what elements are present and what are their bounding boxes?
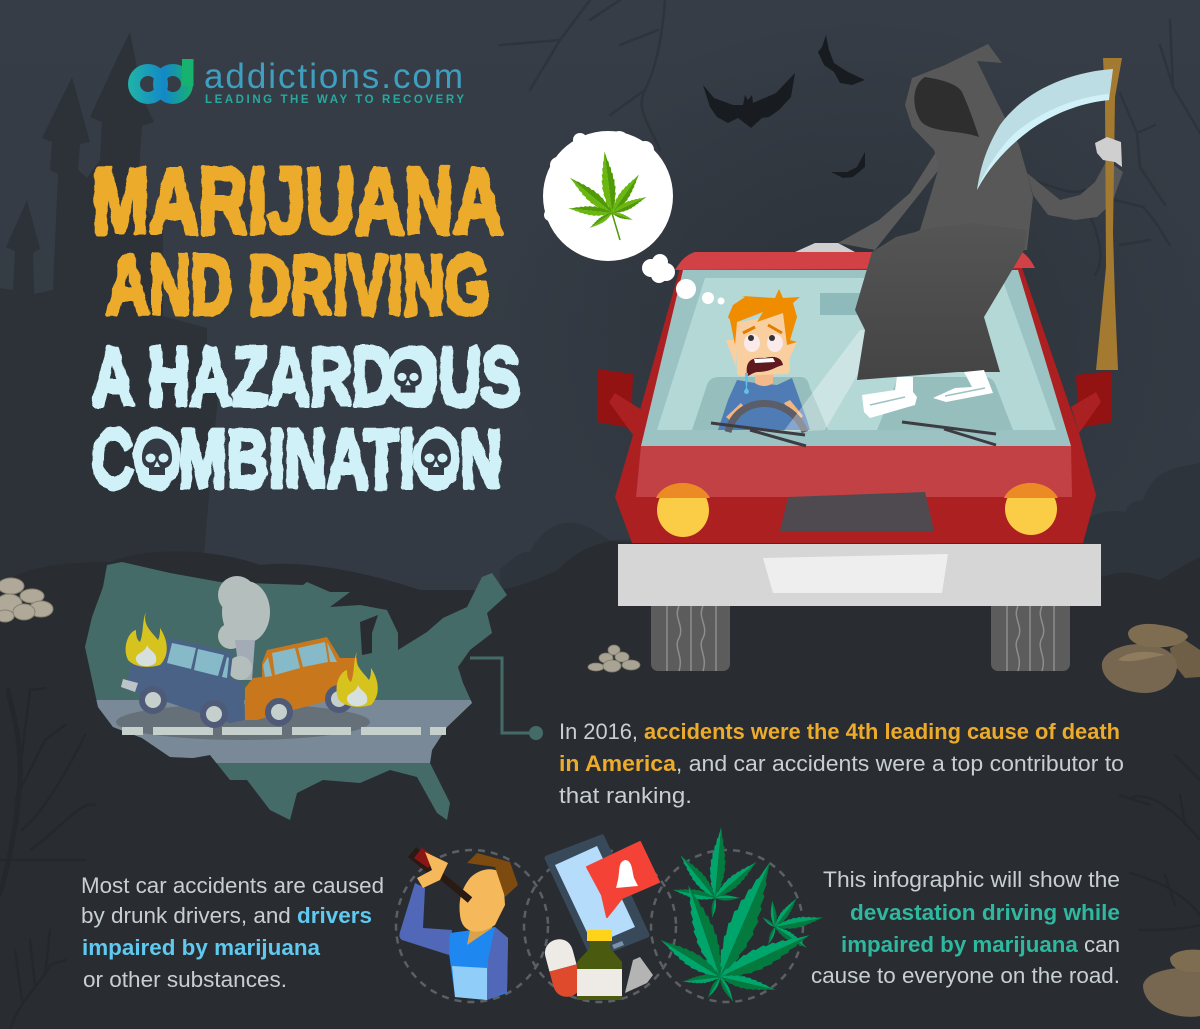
o backing hazardous: [386, 347, 430, 405]
left line 2: by drunk drivers, and drivers: [81, 903, 372, 928]
icon: pill: [542, 936, 584, 1000]
mirror right: [1071, 371, 1112, 433]
driver teeth: [754, 358, 775, 363]
alert bubble: [587, 842, 659, 917]
blue car body: [125, 638, 245, 723]
man shirt lower: [452, 966, 487, 1000]
road: [96, 700, 472, 763]
driver drool: [744, 373, 749, 394]
ground silhouette: [0, 541, 1200, 1029]
o backing combination right: [413, 428, 459, 488]
man hair: [467, 853, 518, 897]
right wiper: [902, 422, 996, 445]
blue car wheels: [142, 689, 225, 725]
fact line 3: that ranking.: [559, 783, 692, 808]
scythe blade edge: [977, 94, 1109, 190]
title line: and driving: AND DRIVING: [107, 238, 490, 332]
bat medium: [818, 35, 865, 85]
logo wordmark: addictions.com: [204, 57, 463, 96]
flame right: [337, 652, 378, 707]
bumper: [618, 544, 1101, 606]
left text block: [81, 873, 384, 992]
skeleton hand on pole: [1095, 137, 1122, 167]
right line 2: devastation driving while: [850, 900, 1120, 925]
left line 1: Most car accidents are caused: [81, 873, 384, 898]
marijuana leaf in thought: [566, 151, 648, 240]
alert bell: [616, 860, 638, 888]
bat large: [703, 73, 795, 128]
title: [92, 148, 520, 505]
man arm: [399, 883, 452, 955]
orange car windows: [263, 642, 337, 677]
rear view mirror: [820, 293, 860, 315]
background grass left: [0, 688, 95, 1029]
smoke: [218, 576, 270, 680]
blue car windows: [167, 643, 229, 678]
connector line: [470, 658, 543, 740]
right line 4: cause to everyone on the road.: [811, 963, 1120, 988]
thought bubble: [543, 131, 724, 304]
car: [615, 252, 1101, 671]
thought cloud: [543, 131, 673, 261]
blue car tail light: [121, 679, 138, 692]
right headlight: [1004, 483, 1058, 535]
logo icon: [134, 59, 194, 98]
icon: medicine bottle: [577, 930, 622, 1000]
leaf small right: [761, 896, 824, 951]
skull in combination right: [421, 438, 451, 475]
driver face: [735, 313, 790, 376]
accident fact text: [559, 719, 1124, 808]
reaper right arm: [1027, 160, 1123, 220]
skull in combination left: [142, 438, 172, 475]
rocks: small pile by car: [588, 645, 640, 672]
map land: [85, 562, 507, 820]
rocks: brown right pile: [1102, 624, 1200, 693]
car frame: [615, 268, 1096, 543]
fact line 1: In 2016, accidents were the 4th leading cause of death: [559, 719, 1120, 744]
reaper left arm: [838, 152, 941, 250]
road dashes: [122, 727, 446, 735]
driver: [718, 289, 810, 432]
icon: marijuana leaves: [657, 827, 824, 1003]
o backing combination left: [133, 428, 181, 488]
reaper cloak: [855, 223, 1027, 380]
phone button: [612, 941, 624, 949]
leaf large: [657, 857, 814, 1003]
logo tagline: LEADING THE WAY TO RECOVERY: [205, 94, 464, 106]
shadow behind reaper and car: [500, 20, 1200, 620]
phone screen: [555, 846, 635, 945]
fact line 2: in America, and car accidents were a top contributor to: [559, 751, 1124, 776]
left headlight: [656, 483, 710, 537]
man head: [459, 869, 505, 932]
thought trail: [642, 254, 724, 304]
license plate: [763, 554, 948, 593]
icon: powder bag: [625, 957, 653, 993]
orange car wheels: [268, 688, 350, 723]
driver shirt: [718, 378, 810, 430]
grille: [780, 492, 934, 531]
title line: marijuana: MARIJUANA: [92, 148, 503, 253]
background bushes: [500, 463, 1200, 620]
rocks: brown bottom right pile: [1143, 950, 1200, 1017]
background haunted castle silhouette: [0, 32, 218, 620]
flame left: [126, 612, 167, 667]
man sleeve: [487, 927, 508, 1000]
left wiper: [711, 423, 806, 446]
right wheel: [991, 600, 1070, 671]
driver ears: [726, 340, 797, 367]
icon: drunk man: [399, 848, 518, 1000]
orange car: [245, 637, 360, 723]
logo: [134, 57, 464, 106]
title line: combination: COMBINATION: [92, 412, 502, 505]
background grass right: [1120, 755, 1200, 930]
skeleton legs: [862, 370, 993, 418]
man vest: [449, 927, 508, 1000]
blue car: [121, 638, 245, 725]
steering wheel: [728, 404, 805, 432]
hood opening: [914, 77, 979, 137]
windshield: [641, 270, 1071, 446]
driver neck: [755, 372, 773, 386]
mirror left: [597, 369, 642, 435]
left line 3: impaired by marijuana: [82, 935, 321, 960]
reaper: [795, 44, 1123, 370]
great lakes: [360, 615, 378, 655]
roof: [675, 252, 1035, 270]
phone body: [547, 837, 647, 957]
scythe pole: [1096, 58, 1122, 370]
left wheel: [651, 600, 730, 671]
scythe blade: [977, 69, 1113, 190]
driver eyes: [744, 334, 783, 352]
man hand: [417, 852, 448, 888]
driver mouth: [747, 357, 783, 376]
right text block: [811, 867, 1120, 988]
right line 3: impaired by marijuana can: [841, 932, 1120, 957]
driver eyebrows: [743, 325, 782, 333]
dashed circles: [396, 850, 803, 1002]
us map: [70, 562, 507, 820]
windshield highlight: [657, 278, 1056, 430]
background trees: [500, 0, 1200, 275]
right line 1: This infographic will show the: [823, 867, 1120, 892]
skull in hazardous: [394, 359, 422, 393]
orange car body: [245, 637, 360, 720]
man neck: [467, 905, 492, 945]
car seats: [692, 377, 1013, 430]
reaper hooded body: [872, 44, 1033, 252]
left line 4: or other substances.: [83, 967, 287, 992]
hood: [636, 446, 1072, 497]
rocks: left pile: [0, 578, 53, 622]
icon: phone: [547, 837, 659, 957]
driver hair: [728, 289, 800, 345]
bat small: [831, 152, 865, 178]
driver hands: [726, 400, 803, 423]
bottle: [412, 848, 470, 900]
light streak on glass: [783, 330, 880, 432]
title line: a hazardous: A HAZARDOUS: [92, 330, 520, 423]
road shadow: [116, 704, 370, 740]
leaf top: [672, 827, 760, 918]
skull shoulder highlight: [795, 243, 855, 252]
